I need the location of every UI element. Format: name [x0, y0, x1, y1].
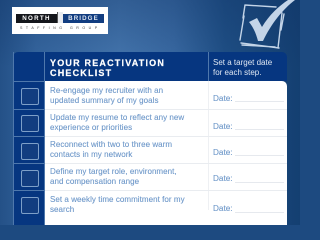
- date 5: Date:: [213, 204, 233, 213]
- checkbox column: [13, 81, 45, 225]
- heading: CHECKLIST: [50, 68, 112, 78]
- checkbox 1: [21, 88, 39, 105]
- step 4: Define my target role, environment,: [50, 167, 177, 176]
- heading note: [213, 58, 272, 77]
- logo: NORTH: [22, 14, 51, 22]
- step 2: [50, 113, 184, 132]
- heading: YOUR REACTIVATION: [50, 58, 165, 68]
- checkbox 4: [21, 170, 39, 187]
- heading note: for each step.: [213, 68, 261, 77]
- logo: BRIDGE: [68, 14, 99, 22]
- heading: [50, 58, 165, 78]
- checkbox 5: [21, 197, 39, 214]
- table body: [45, 81, 287, 225]
- panel: checklist: [14, 52, 287, 81]
- step 4: [50, 167, 177, 186]
- step 2: Update my resume to reflect any new: [50, 113, 184, 122]
- step 5: [50, 195, 185, 214]
- step 1: updated summary of my goals: [50, 96, 159, 104]
- step 2: experience or priorities: [50, 122, 132, 132]
- checkbox 3: [21, 143, 39, 160]
- step 5: Set a weekly time commitment for my: [50, 195, 185, 204]
- icon: checkbox with check mark: [239, 0, 295, 49]
- step 3: contacts in my network: [50, 150, 132, 158]
- logo: [12, 7, 108, 34]
- step 5: search: [50, 204, 74, 214]
- step 1: Re-engage my recruiter with an: [50, 86, 163, 95]
- heading note: Set a target date: [213, 58, 272, 67]
- step 3: [50, 140, 172, 158]
- date 1: Date:: [213, 94, 233, 103]
- date 2: Date:: [213, 122, 233, 131]
- step 4: and compensation range: [50, 176, 139, 186]
- date 3: Date:: [213, 148, 233, 157]
- logo: STAFFING GROUP: [20, 26, 101, 30]
- step 3: Reconnect with two to three warm: [50, 140, 172, 149]
- table header bar: [13, 52, 287, 81]
- checkbox 2: [21, 115, 39, 132]
- date 4: Date:: [213, 174, 233, 183]
- step 1: [50, 86, 163, 104]
